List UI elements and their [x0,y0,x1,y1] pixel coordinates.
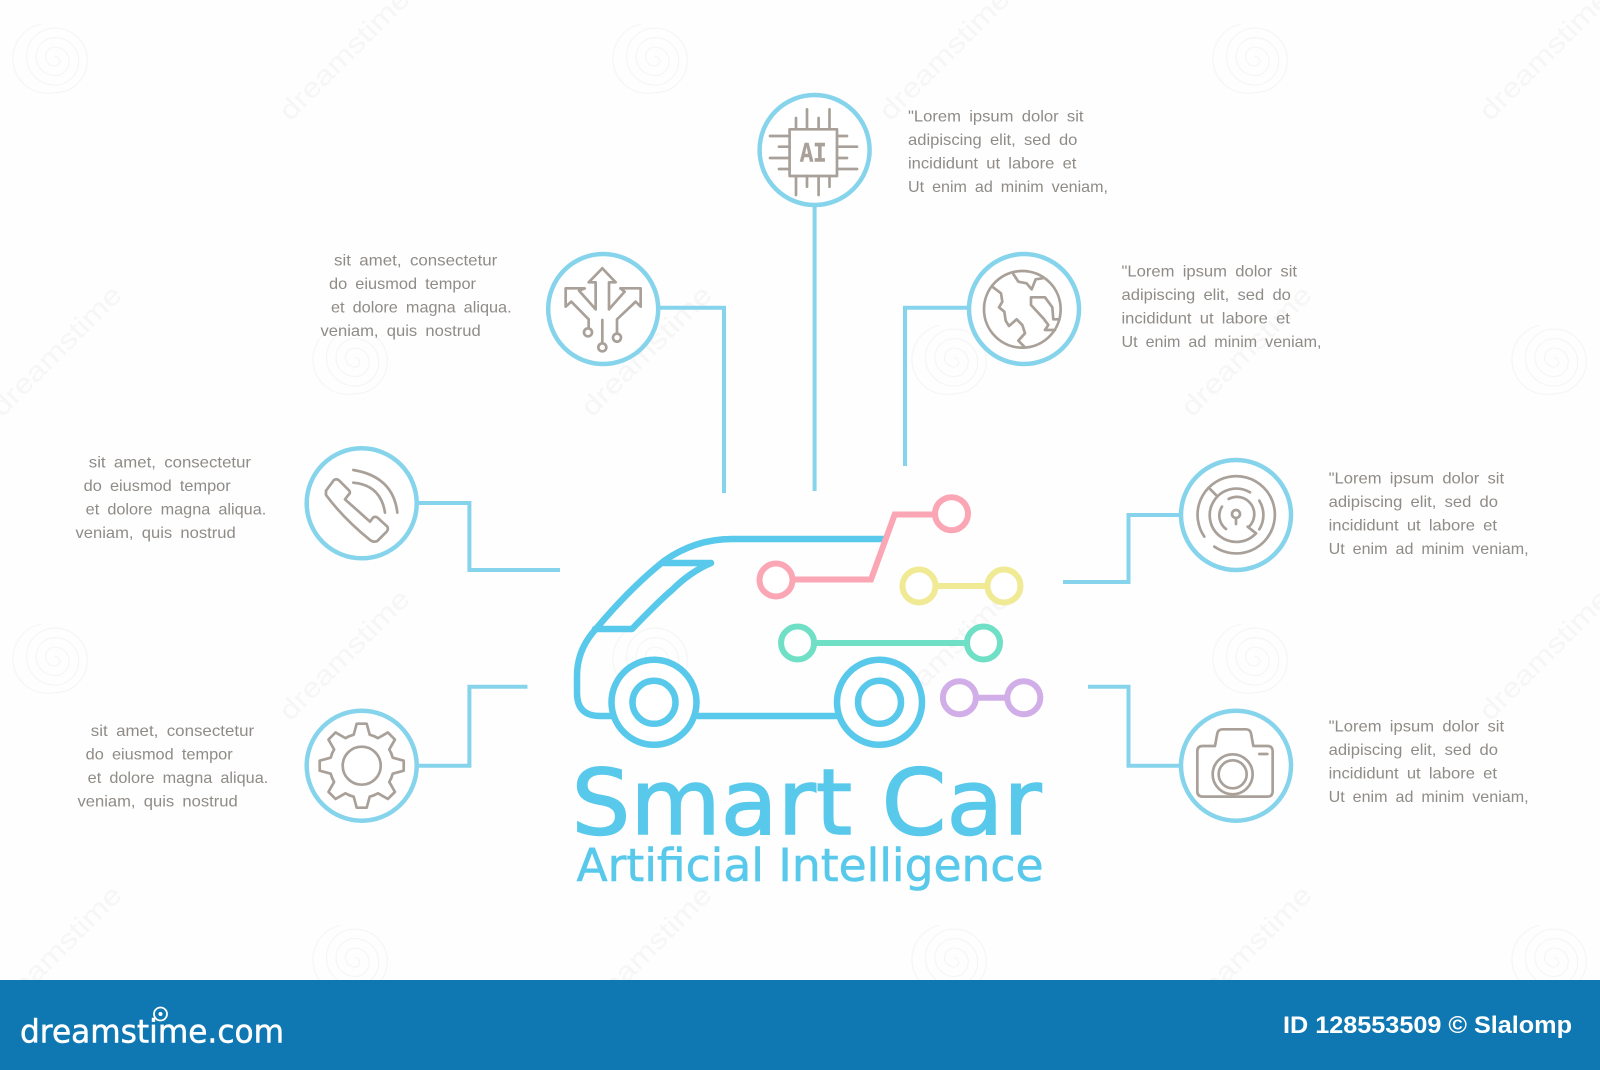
icon: globe [984,271,1061,348]
purple circuit trace [943,681,1040,714]
text block: direction arrows: do eiusmod tempor [329,276,477,293]
text block: gear [78,723,268,810]
icon: globe ring [969,254,1079,364]
front wheel [612,660,696,745]
footer logo: dreamstime.com [20,1013,284,1051]
text block: phone: veniam, quis nostrud [76,525,236,542]
icon: AI chip ring [760,95,870,205]
panel: camera [1181,711,1529,821]
icon: gear ring [307,711,417,821]
green circuit trace [781,626,1000,660]
text block: globe [1122,264,1322,351]
text block: AI chip [908,108,1108,196]
panel: maze [1181,460,1529,570]
pink circuit trace [760,497,968,596]
icon: phone ring [307,448,417,558]
watermark pattern: dreamstime [575,879,718,1022]
text block: globe: Ut enim ad minim veniam, [1122,334,1322,351]
subtitle: Artificial Intelligence [576,839,1044,892]
text block: camera: Ut enim ad minim veniam, [1329,789,1529,806]
windshield [595,563,711,629]
footer band [0,980,1600,1070]
text block: camera: adipiscing elit, sed do [1329,742,1498,759]
central smart car illustration [577,497,1040,745]
panel: globe [969,254,1322,364]
watermark pattern: dreamstime [273,583,416,726]
underbody [698,713,836,719]
watermark pattern: dreamstime [1175,279,1318,422]
text block: globe: incididunt ut labore et [1122,310,1290,328]
icon: AI chip [770,109,857,195]
watermark pattern: dreamstime [575,279,718,422]
text block: camera: "Lorem ipsum dolor sit [1329,719,1505,736]
panel: phone [76,448,417,558]
text block: gear: veniam, quis nostrud [78,793,238,810]
text block: direction arrows: veniam, quis nostrud [320,323,481,340]
icon: arrows ring [548,254,658,364]
text block: maze: "Lorem ipsum dolor sit [1329,471,1505,488]
text block: maze: Ut enim ad minim veniam, [1329,541,1529,558]
icon: maze ring [1181,460,1291,570]
icon: branching arrows [566,268,641,351]
text block: phone: sit amet, consectetur [89,454,252,471]
image id credit: ID 128553509 © Slalomp [1283,1012,1572,1039]
text block: globe: adipiscing elit, sed do [1122,287,1291,304]
text block: phone: do eiusmod tempor [84,478,231,495]
icon: circular maze [1198,476,1275,553]
icon: phone handset [326,470,397,542]
title: Smart Car [572,751,1042,856]
text block: AI chip: adipiscing elit, sed do [908,132,1078,149]
watermark pattern: dreamstime [1473,0,1600,126]
panel: gear [78,711,417,821]
rear wheel [837,660,922,745]
watermark pattern: dreamstime [873,583,1016,726]
text block: AI chip: incididunt ut labore et [908,156,1077,172]
text block: AI chip: "Lorem ipsum dolor sit [908,108,1084,126]
panel: AI chip [760,95,1108,205]
text block: direction arrows: et dolore magna aliqua. [331,300,512,316]
text block: direction arrows [320,252,512,340]
text block: maze: incididunt ut labore et [1329,518,1498,534]
text block: direction arrows: sit amet, consectetur [334,252,498,269]
text block: phone [76,454,266,542]
text block: gear: do eiusmod tempor [86,746,233,763]
watermark pattern: dreamstime [1473,583,1600,726]
car body outline [577,539,884,716]
text block: phone: et dolore magna aliqua. [86,502,266,518]
icon: AI chip: AI [800,140,826,171]
connector lines [418,205,1179,766]
text block: camera [1329,719,1529,806]
text block: camera: incididunt ut labore et [1329,766,1498,782]
icon: camera [1197,729,1273,797]
watermark pattern: dreamstime [1175,879,1318,1022]
panel: direction arrows [320,252,658,364]
icon: camera ring [1181,711,1291,821]
text block: maze: adipiscing elit, sed do [1329,494,1498,511]
text block: AI chip: Ut enim ad minim veniam, [908,179,1108,196]
text block: gear: sit amet, consectetur [91,723,255,740]
text block: globe: "Lorem ipsum dolor sit [1122,264,1298,280]
watermark pattern: dreamstime [873,0,1016,126]
text block: gear: et dolore magna aliqua. [88,770,268,787]
yellow circuit trace [902,570,1020,602]
icon: gear [320,724,404,808]
watermark pattern: dreamstime [273,0,416,126]
text block: maze [1329,471,1529,558]
